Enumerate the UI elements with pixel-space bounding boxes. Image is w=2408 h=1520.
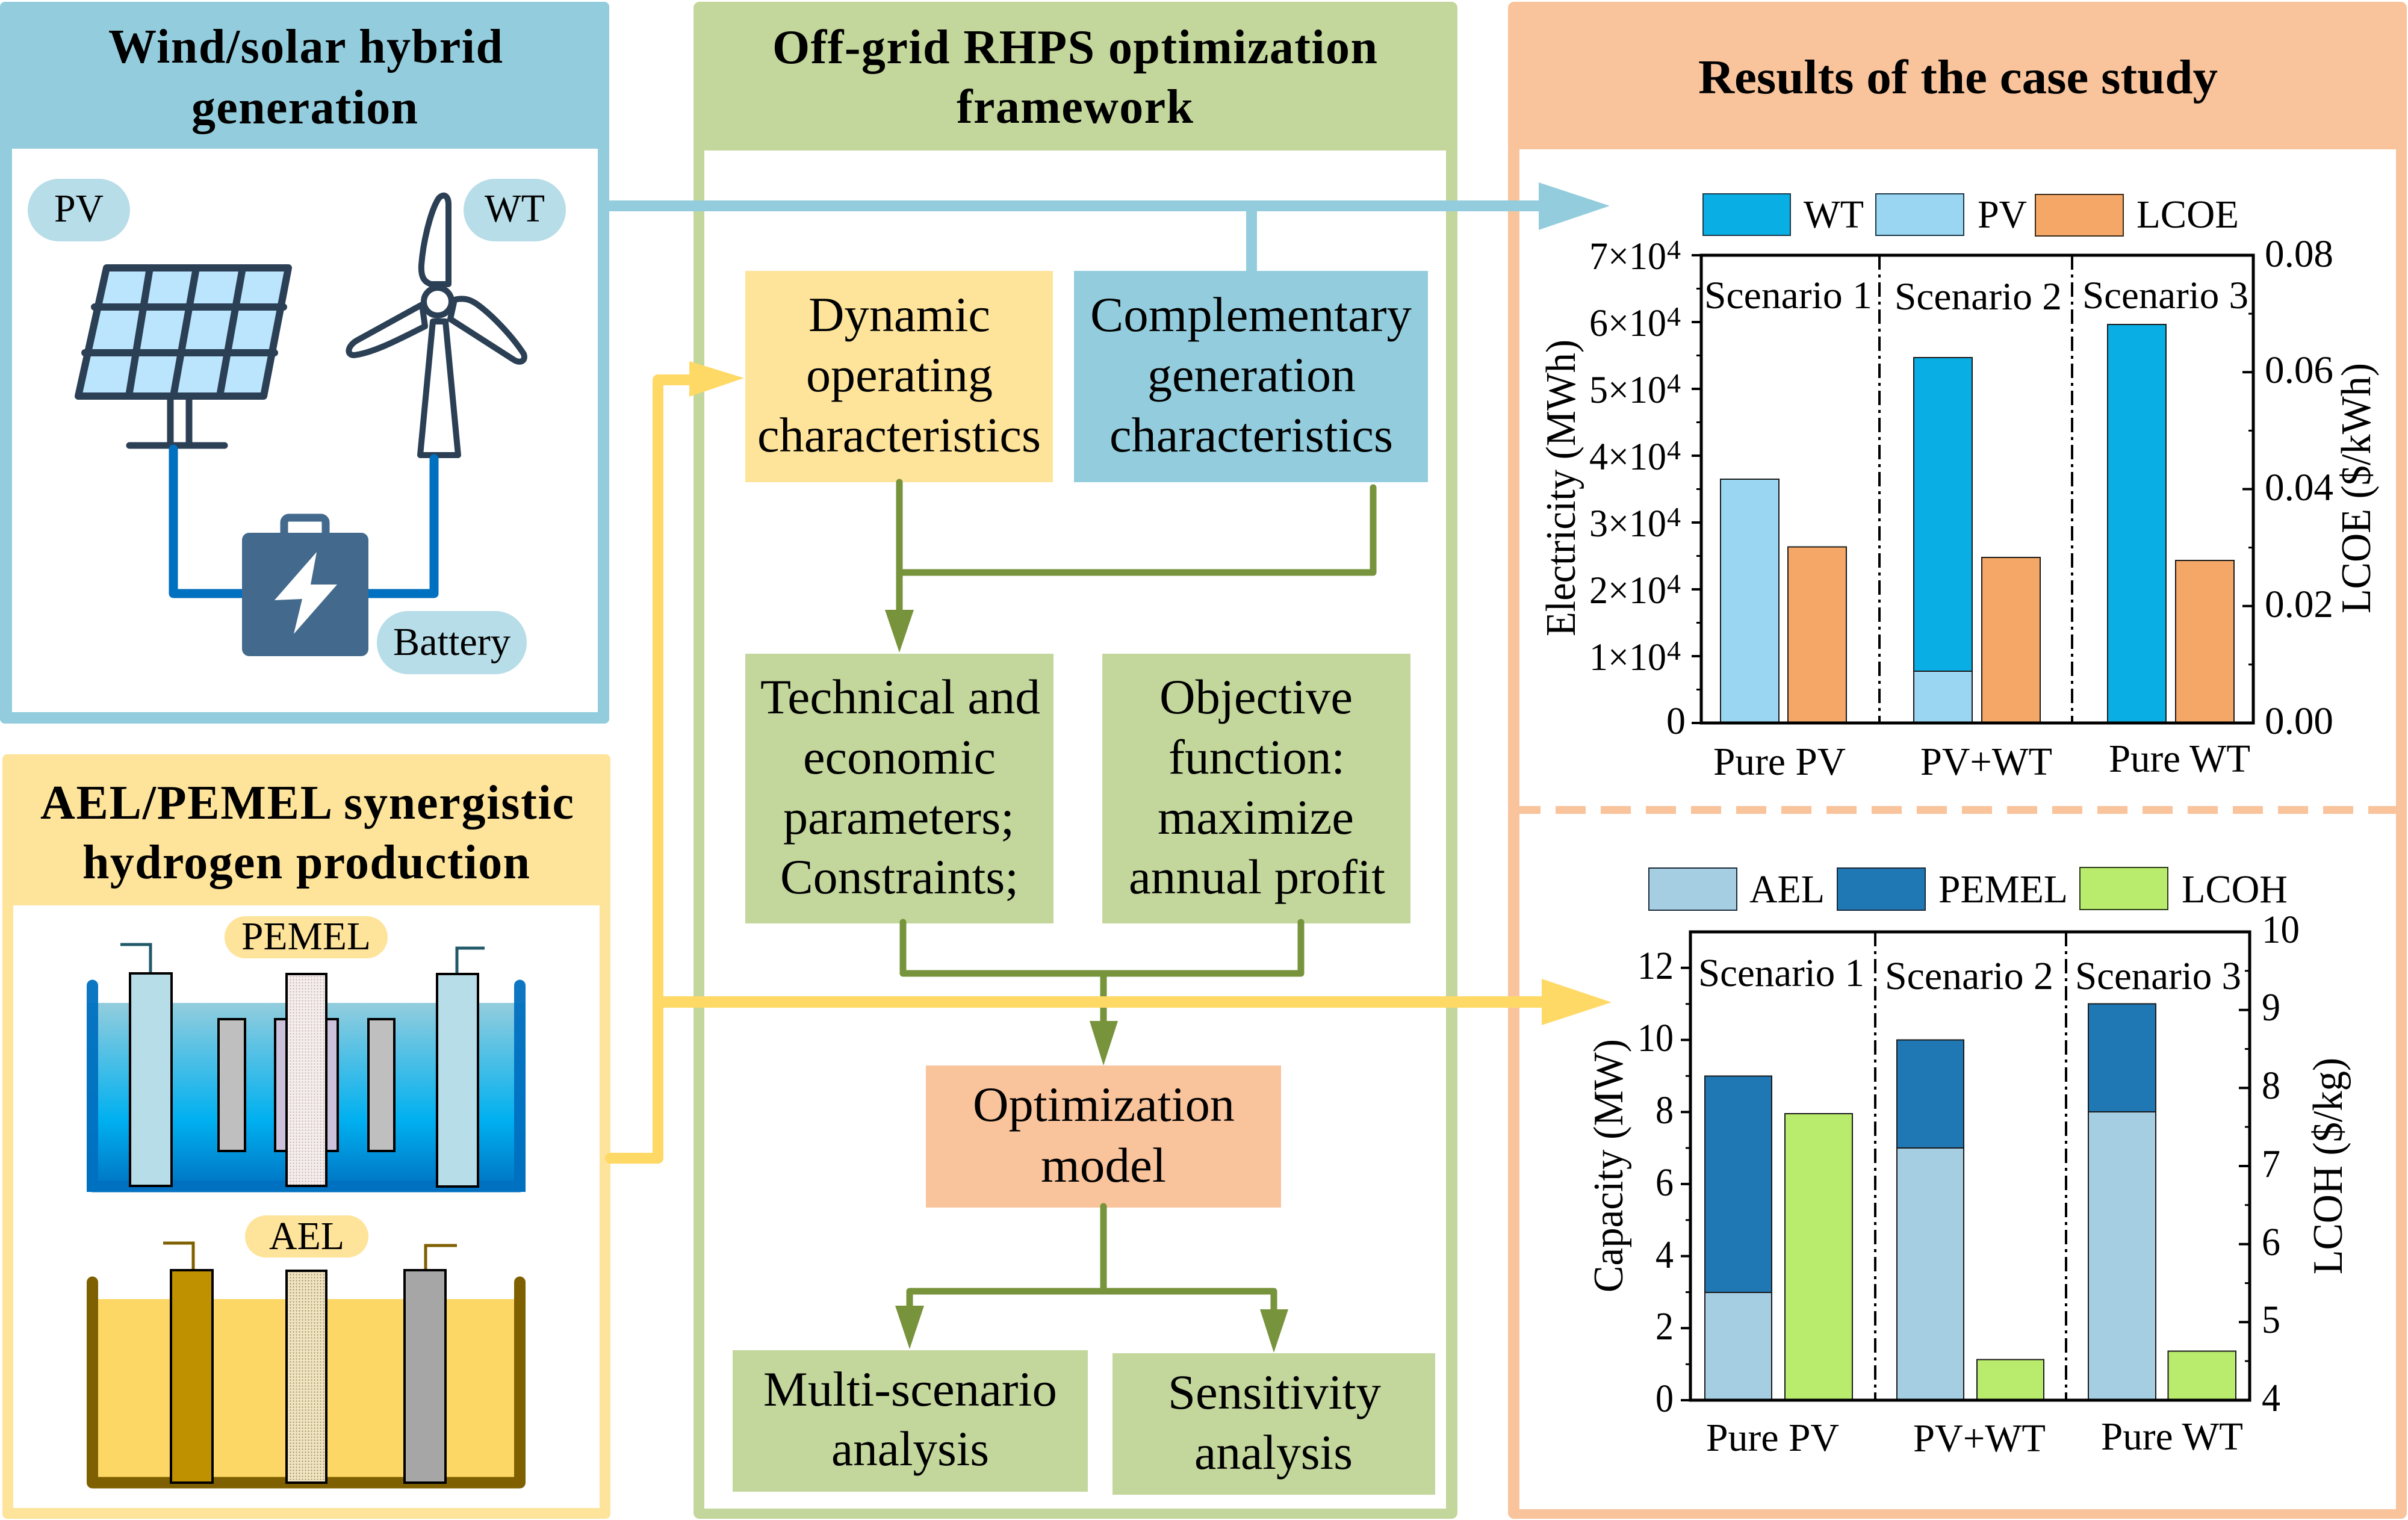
box: complementary generation characteristics: characteristics [1109,408,1393,462]
label: WT: WT [485,187,545,231]
right axis labels [2265,232,2333,743]
chart: capacity and LCOH [1586,867,2351,1460]
arrow: wind/solar to results [609,182,1610,271]
right axis labels: 8 [2262,1064,2280,1108]
heading: AEL/PEMEL synergistic hydrogen production [40,777,574,889]
axis title: electricity: Electricity (MWh) [1538,340,1584,636]
axis title: capacity: Capacity (MW) [1586,1039,1632,1292]
left axis labels [1589,234,1686,743]
heading: AEL/PEMEL synergistic hydrogen production: AEL/PEMEL synergistic [40,777,574,830]
box: multi-scenario analysis: analysis [831,1421,989,1476]
category labels: PV+WT [1920,740,2052,784]
label: battery: Battery [393,620,510,664]
box: complementary generation characteristics: generation [1147,347,1356,402]
icon: solar panel [78,268,288,445]
box: objective function: maximize [1158,790,1354,845]
left axis labels: 6 [1656,1161,1674,1205]
right axis labels: 0.00 [2265,700,2333,743]
connector: PV to battery [173,449,244,594]
label: AEL: AEL [269,1214,344,1258]
right axis labels [2262,908,2300,1420]
scenario labels [1698,951,2241,998]
legend: WT, PV, LCOE: WT [1804,193,1864,237]
legend: AEL, PEMEL, LCOH [1649,867,2288,911]
axis title: LCOE: LCOE ($/kWh) [2333,363,2380,613]
label: AEL [245,1214,368,1258]
heading: results of the case study: Results of the case study [1698,51,2218,104]
scenario labels: Scenario 1 [1704,274,1872,317]
box: sensitivity analysis: analysis [1194,1425,1353,1480]
chart: electricity and LCOE [1538,193,2380,784]
icon: wind turbine [349,196,524,455]
heading: wind/solar hybrid generation: Wind/solar hybrid [108,20,503,73]
bars: capacity and LCOH by scenario [1705,1004,2236,1400]
label: PV: PV [54,187,104,231]
right axis labels: 6 [2262,1220,2280,1264]
category labels: Pure PV [1706,1416,1839,1460]
left axis labels: 3×10 [1589,502,1666,545]
right axis labels: 0.02 [2265,583,2333,626]
box: optimization model [926,1066,1281,1208]
axes frame and ticks [1681,932,2250,1400]
arrow: inputs to optimization model [903,922,1301,1066]
box: sensitivity analysis: Sensitivity [1168,1365,1381,1419]
right axis labels: 7 [2262,1142,2280,1186]
left axis labels: 4 [1667,501,1681,532]
panel: off-grid RHPS optimization framework [694,2,1457,1519]
left axis labels: 6×10 [1589,302,1666,345]
label: PEMEL: PEMEL [241,914,371,958]
connector: WT to battery [366,459,434,594]
box: technical and economic parameters: parameters; [783,790,1014,845]
heading: off-grid RHPS optimization framework [772,21,1377,134]
axis title: LCOH: LCOH ($/kg) [2305,1058,2351,1274]
arrow: characteristics to parameters [885,482,1373,653]
right axis labels: 0.06 [2265,349,2333,392]
label: WT [464,179,566,241]
category labels: PV+WT [1913,1416,2046,1460]
left axis labels: 4 [1656,1233,1674,1277]
diagram: PEMEL electrolyser [87,945,526,1192]
category labels [1713,737,2250,784]
box: technical and economic parameters: Constraints; [780,849,1019,904]
left axis labels: 4 [1667,301,1681,332]
legend: WT, PV, LCOE: PV [1978,193,2027,237]
left axis labels: 10 [1637,1016,1674,1060]
box: multi-scenario analysis: Multi-scenario [763,1362,1057,1416]
box: optimization model: model [1041,1138,1166,1193]
heading: off-grid RHPS optimization framework: framework [957,81,1193,134]
left axis labels: 4 [1667,635,1681,666]
category labels [1706,1415,2243,1460]
box: objective function: annual profit [1129,849,1385,904]
box: complementary generation characteristics: Complementary [1090,287,1412,342]
right axis labels: 0.04 [2265,466,2333,509]
left axis labels: 5×10 [1589,368,1666,412]
right axis labels: 4 [2262,1376,2280,1420]
category labels: Pure WT [2109,737,2250,781]
bars: electricity and LCOE by scenario [1721,324,2234,723]
heading: wind/solar hybrid generation [108,20,503,134]
heading: AEL/PEMEL synergistic hydrogen production: hydrogen production [82,836,530,889]
box: complementary generation characteristics [1074,271,1428,482]
heading: wind/solar hybrid generation: generation [191,81,418,134]
left axis labels: 2 [1656,1304,1674,1348]
left axis labels: 4×10 [1589,435,1666,479]
left axis labels: 12 [1637,944,1674,988]
legend: AEL, PEMEL, LCOH: LCOH [2182,867,2288,911]
scenario labels: Scenario 2 [1894,275,2062,318]
box: dynamic operating characteristics [745,271,1053,482]
legend: AEL, PEMEL, LCOH: PEMEL [1938,867,2068,911]
panel: AEL/PEMEL hydrogen production [2,754,610,1519]
left axis labels: 4 [1667,234,1681,265]
right axis labels: 9 [2262,985,2280,1029]
legend: WT, PV, LCOE: LCOE [2136,193,2239,237]
right axis labels: 10 [2262,908,2300,952]
scenario labels: Scenario 3 [2075,954,2241,998]
axes frame and ticks [1692,255,2253,723]
box: multi-scenario analysis [733,1350,1088,1492]
scenario labels: Scenario 1 [1698,951,1864,995]
box: dynamic operating characteristics: Dynamic [808,287,990,342]
box: objective function [1102,654,1410,923]
legend: AEL, PEMEL, LCOH: AEL [1749,867,1825,911]
label: PV [28,179,130,241]
label: battery [377,611,527,674]
box: objective function: function: [1168,730,1345,784]
right axis labels: 5 [2262,1298,2280,1342]
box: optimization model: Optimization [973,1077,1235,1132]
heading: off-grid RHPS optimization framework: Off-grid RHPS optimization [772,21,1377,74]
left axis labels: 4 [1667,568,1681,599]
box: sensitivity analysis [1112,1353,1435,1495]
category labels: Pure WT [2101,1415,2243,1459]
diagram: AEL electrolyser [92,1243,520,1483]
left axis labels: 8 [1656,1088,1674,1132]
panel: wind/solar hybrid generation [0,2,609,724]
category labels: Pure PV [1713,740,1846,784]
left axis labels: 4 [1667,368,1681,399]
left axis labels: 0 [1656,1377,1674,1421]
right axis labels: 0.08 [2265,232,2333,276]
left axis labels: 1×10 [1589,636,1666,679]
left axis labels: 0 [1666,700,1686,743]
box: dynamic operating characteristics: operating [806,347,993,402]
scenario labels: Scenario 3 [2082,274,2248,317]
scenario labels: Scenario 2 [1885,954,2053,998]
box: objective function: Objective [1159,669,1353,724]
box: technical and economic parameters: Technical and [760,669,1040,724]
scenario labels [1704,274,2248,318]
icon: battery [242,518,368,656]
left axis labels: 7×10 [1589,235,1666,278]
legend: WT, PV, LCOE [1703,193,2239,237]
left axis labels: 4 [1667,435,1681,465]
box: technical and economic parameters [745,654,1054,923]
box: dynamic operating characteristics: characteristics [757,408,1041,462]
arrow: AEL/PEMEL to dynamic characteristics and results [610,361,1612,1158]
left axis labels: 2×10 [1589,569,1666,612]
arrow: optimization model to analyses [895,1206,1288,1353]
left axis labels [1637,944,1674,1421]
box: technical and economic parameters: economic [803,730,996,784]
